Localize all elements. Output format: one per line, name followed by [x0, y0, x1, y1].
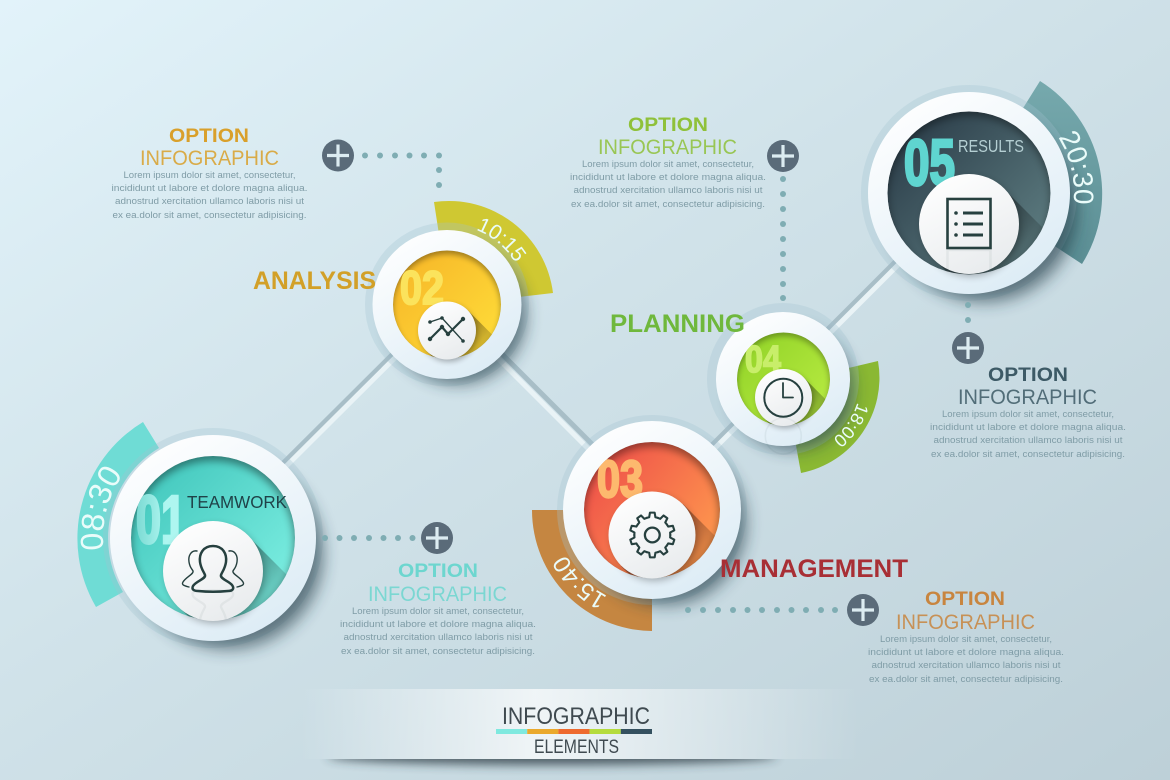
icon reflection — [192, 589, 234, 620]
callout: lower right option — [685, 589, 1064, 685]
colour bar — [496, 729, 652, 734]
node 02 analysis — [253, 201, 553, 396]
infographic heading: INFOGRAPHIC — [598, 135, 737, 159]
banner strip — [300, 689, 860, 759]
icon: plus — [767, 140, 799, 172]
icon reflection — [765, 418, 801, 454]
disc shadow — [757, 372, 813, 428]
halo — [861, 85, 1077, 301]
body text: ex ea.dolor sit amet, consectetur adipisicing. — [869, 674, 1063, 685]
time arc 10:15 — [434, 201, 553, 298]
node 04 planning — [610, 303, 880, 473]
white disc — [163, 521, 263, 621]
icon: people — [182, 546, 244, 592]
body text: incididunt ut labore et dolore magna aliqua. — [340, 619, 536, 630]
coloured well: 05 — [904, 126, 955, 199]
option heading: OPTION — [169, 126, 249, 147]
callout: top centre option — [570, 115, 799, 301]
body text: incididunt ut labore et dolore magna aliqua. — [868, 647, 1064, 658]
dotted connector — [965, 302, 971, 323]
body text: Lorem ipsum dolor sit amet, consectetur, — [124, 170, 296, 181]
body text — [112, 170, 308, 221]
body text: adnostrud xercitation ullamco laboris nisi ut — [344, 632, 533, 643]
coloured well — [131, 456, 295, 618]
time label: 10:15 — [477, 218, 526, 261]
ring shadow — [891, 116, 1077, 302]
icon reflection — [946, 250, 992, 270]
disc shadow — [166, 525, 264, 623]
disc shadow — [612, 496, 696, 580]
dotted connector — [780, 176, 786, 301]
white ring — [716, 312, 850, 446]
coloured well: 04 — [745, 339, 781, 381]
option heading: OPTION — [398, 561, 478, 582]
step name: TEAMWORK — [187, 492, 287, 512]
ring shadow — [133, 459, 323, 649]
body text: Lorem ipsum dolor sit amet, consectetur, — [880, 634, 1052, 645]
icon: plus — [952, 332, 984, 364]
option heading: OPTION — [628, 115, 708, 136]
body text: adnostrud xercitation ullamco laboris nisi ut — [574, 185, 763, 196]
icon: plus — [322, 140, 354, 172]
ring shadow — [733, 330, 853, 450]
callout: right option — [930, 302, 1126, 460]
coloured well — [393, 250, 501, 358]
coloured well: 03 — [597, 451, 643, 509]
step name: PLANNING — [610, 310, 745, 338]
coloured well: 02 — [400, 261, 444, 314]
body text: adnostrud xercitation ullamco laboris nisi ut — [115, 196, 304, 207]
step name: MANAGEMENT — [720, 555, 908, 583]
callout: lower left option — [322, 522, 536, 657]
time label: 08:30 — [80, 466, 120, 550]
time arc 20:30 — [1020, 81, 1102, 264]
body text: Lorem ipsum dolor sit amet, consectetur, — [352, 606, 524, 617]
step name: ANALYSIS — [253, 267, 376, 295]
coloured well — [737, 332, 830, 425]
option heading: OPTION — [988, 365, 1068, 386]
icon: gear — [629, 513, 675, 557]
infographic heading: INFOGRAPHIC — [368, 582, 507, 606]
node 03 management — [532, 415, 908, 631]
white disc — [608, 492, 696, 578]
body text — [570, 159, 766, 210]
node 05 results — [861, 81, 1102, 313]
icon: plus — [847, 594, 879, 626]
icon: line chart — [428, 316, 465, 343]
icon: plus — [421, 522, 453, 554]
infographic heading: INFOGRAPHIC — [958, 385, 1097, 409]
disc shadow — [922, 178, 1020, 276]
infographic heading: INFOGRAPHIC — [140, 146, 279, 170]
dotted connector — [362, 152, 442, 188]
body text: adnostrud xercitation ullamco laboris nisi ut — [872, 660, 1061, 671]
body text: incididunt ut labore et dolore magna aliqua. — [112, 183, 308, 194]
halo — [103, 428, 323, 648]
halo — [557, 415, 747, 605]
white ring — [372, 230, 522, 379]
coloured well: 01 — [136, 482, 186, 558]
body text: adnostrud xercitation ullamco laboris nisi ut — [934, 435, 1123, 446]
body text: Lorem ipsum dolor sit amet, consectetur, — [582, 159, 754, 170]
white disc — [755, 369, 812, 426]
halo — [365, 222, 529, 386]
time arc 18:00 — [795, 361, 879, 473]
time label: 20:30 — [1059, 131, 1094, 204]
infographic heading: INFOGRAPHIC — [896, 610, 1035, 634]
time label: 15:40 — [554, 558, 606, 608]
body text: incididunt ut labore et dolore magna aliqua. — [930, 422, 1126, 433]
white ring — [868, 92, 1070, 294]
callout: top left option — [112, 126, 442, 221]
bottom banner — [300, 689, 860, 765]
body text: incididunt ut labore et dolore magna aliqua. — [570, 172, 766, 183]
coloured well — [888, 112, 1050, 274]
white ring — [110, 435, 316, 641]
white disc — [418, 302, 476, 360]
dotted connector — [685, 607, 838, 613]
body text: ex ea.dolor sit amet, consectetur adipisicing. — [341, 646, 535, 657]
banner subtitle: ELEMENTS — [534, 737, 619, 758]
body text: ex ea.dolor sit amet, consectetur adipisicing. — [931, 449, 1125, 460]
step name: RESULTS — [958, 136, 1024, 156]
white disc — [919, 174, 1019, 274]
body text: ex ea.dolor sit amet, consectetur adipisicing. — [112, 210, 306, 221]
body text — [930, 409, 1126, 460]
white ring — [563, 421, 741, 599]
time label: 18:00 — [834, 404, 868, 446]
coloured well — [584, 442, 720, 578]
connector lines — [211, 190, 970, 538]
halo — [707, 303, 859, 455]
icon: clock — [764, 379, 802, 417]
banner title: INFOGRAPHIC — [502, 703, 650, 730]
node 01 teamwork — [77, 422, 334, 660]
disc shadow — [420, 304, 477, 362]
body text — [868, 634, 1064, 685]
body text: ex ea.dolor sit amet, consectetur adipisicing. — [571, 199, 765, 210]
option heading: OPTION — [925, 589, 1005, 610]
dotted connector — [322, 535, 416, 541]
time arc 08:30 — [77, 422, 159, 607]
body text: Lorem ipsum dolor sit amet, consectetur, — [942, 409, 1114, 420]
ring shadow — [584, 443, 746, 605]
ring shadow — [390, 248, 526, 384]
icon: list document — [948, 199, 990, 248]
body text — [340, 606, 536, 657]
banner shadow — [324, 759, 780, 773]
time arc 15:40 — [532, 510, 652, 631]
